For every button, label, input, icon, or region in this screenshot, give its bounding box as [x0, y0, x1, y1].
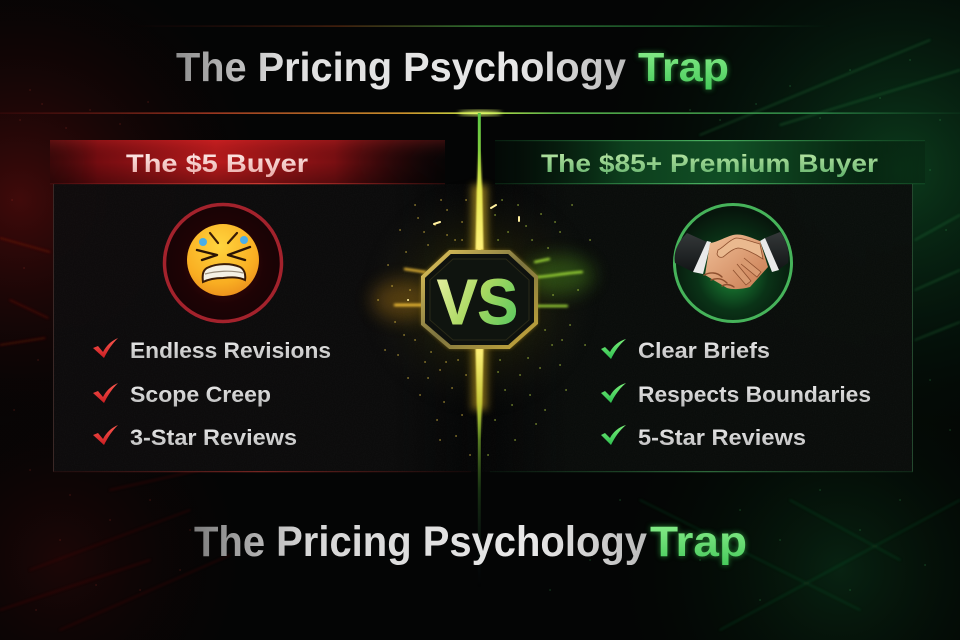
list item: Endless Revisions: Endless Revisions: [130, 338, 331, 363]
panel: left card: [53, 184, 478, 472]
title: top: Trap: [638, 44, 729, 90]
VS label: VS: [437, 266, 518, 338]
right sleeve: [765, 232, 789, 270]
banner: left: [50, 140, 445, 184]
banner: right: [495, 140, 925, 184]
panel: right card: [482, 184, 913, 472]
emoji face: [187, 224, 259, 296]
clasped hands: [704, 235, 768, 289]
icon: handshake in green ring: [674, 204, 792, 322]
VS octagon badge: [422, 251, 537, 348]
horizontal divider line: [0, 111, 960, 115]
center glow: [360, 178, 600, 418]
title: top: The Pricing Psychology: [176, 44, 626, 90]
list item: 5-Star Reviews: 5-Star Reviews: [638, 425, 806, 450]
icon: angry face in red ring: [164, 204, 282, 322]
list item: Respects Boundaries: Respects Boundaries: [638, 382, 871, 407]
banner heading: The $85+ Premium Buyer: The $85+ Premium Buyer: [541, 150, 878, 178]
banner heading: The $5 Buyer: The $5 Buyer: [126, 150, 308, 178]
list item: Clear Briefs: Clear Briefs: [638, 338, 770, 363]
left sleeve: [675, 233, 707, 272]
title: bottom: The Pricing Psychology: [194, 518, 647, 566]
sparks around VS: [372, 200, 594, 455]
right list: [601, 338, 871, 450]
title: bottom: Trap: [650, 518, 747, 566]
vertical divider line: [472, 113, 487, 640]
list item: 3-Star Reviews: 3-Star Reviews: [130, 425, 297, 450]
top accent line: [130, 26, 830, 27]
shirt cuffs: [693, 238, 779, 274]
left list: [93, 338, 331, 450]
list item: Scope Creep: Scope Creep: [130, 382, 271, 407]
